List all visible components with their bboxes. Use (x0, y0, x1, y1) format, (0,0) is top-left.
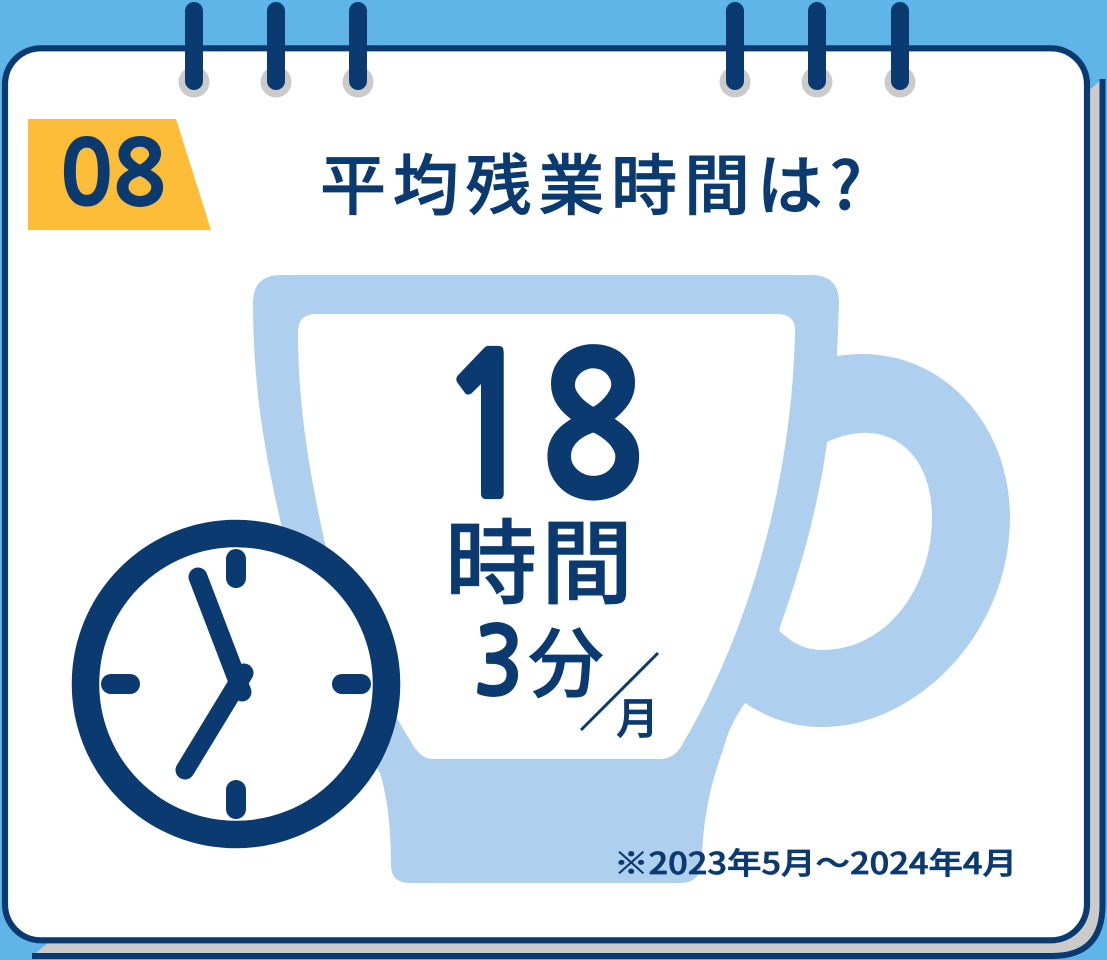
minutes digit: 3 (473, 617, 524, 710)
icon: clock (86, 534, 386, 834)
per month slash (581, 653, 658, 730)
icon: coffee mug (253, 275, 1010, 883)
number badge (28, 119, 211, 230)
binding rings (178, 2, 916, 98)
hours unit: 時間 (445, 490, 633, 623)
main figure (436, 333, 659, 747)
per month unit: 月 (616, 685, 659, 747)
hours number: 18 (436, 333, 644, 526)
footnote: ※2023年5月～2024年4月 (614, 839, 1017, 883)
number badge: 08 (60, 131, 166, 219)
title: 平均残業時間は? (320, 133, 862, 229)
minutes unit: 分 (528, 603, 604, 713)
